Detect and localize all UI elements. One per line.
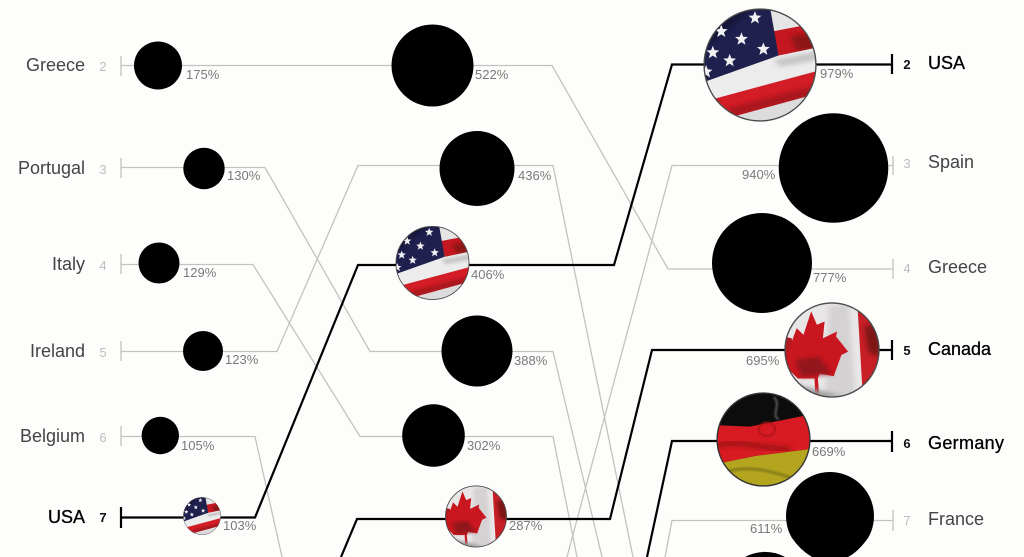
row: Italy left: 129% — [183, 265, 217, 280]
circle: Greece middle: 522% — [475, 67, 509, 82]
row: Italy left: 4 — [99, 258, 107, 273]
row: Ireland left: Ireland — [30, 341, 85, 361]
circle: Ireland middle — [440, 131, 552, 206]
circle: Italy middle — [402, 404, 501, 467]
row: Greece left: Greece — [26, 55, 85, 75]
flag circle: Canada middle — [444, 485, 543, 548]
circle: Portugal middle: 388% — [514, 353, 548, 368]
row: Ireland left: 5 — [99, 345, 107, 360]
row: Belgium left: Belgium — [20, 426, 85, 446]
row: Greece left: 175% — [186, 67, 220, 82]
row: Spain right: Spain — [928, 152, 974, 172]
row: Germany right: Germany — [928, 433, 1004, 453]
row: Greece right — [712, 213, 987, 313]
row: Canada right — [746, 301, 992, 399]
middle column — [392, 24, 552, 548]
row: Spain right: 3 — [903, 156, 911, 171]
row: France right: 7 — [903, 513, 911, 528]
row: Ireland left — [30, 331, 259, 371]
row: Spain right: 940% — [742, 167, 776, 182]
row: USA right: USA — [928, 53, 965, 73]
row: Germany right — [716, 392, 1004, 487]
connector: Germany — [647, 431, 892, 557]
connector: Italy — [121, 254, 577, 557]
row: Ireland left: 123% — [225, 352, 259, 367]
row: Germany right: 6 — [903, 436, 911, 451]
flag circle: USA middle: 406% — [471, 267, 505, 282]
circle: Italy middle: 302% — [467, 438, 501, 453]
row: France right: 611% — [750, 521, 783, 536]
row: Greece right: 777% — [813, 270, 847, 285]
row: USA left — [48, 497, 257, 535]
row: Belgium left: 6 — [99, 430, 107, 445]
circle: Greece middle — [392, 24, 509, 106]
connector: Belgium — [121, 426, 282, 557]
connector: Portugal — [121, 158, 602, 557]
connector: France — [665, 510, 893, 557]
connector: Greece — [121, 56, 893, 279]
row: Italy left — [52, 242, 217, 284]
right column — [700, 8, 1004, 557]
row: USA right: 979% — [820, 66, 854, 81]
connector: Spain — [567, 156, 893, 557]
row: Portugal left: 130% — [227, 168, 261, 183]
row: Belgium left: 105% — [181, 438, 215, 453]
connector: USA — [121, 54, 892, 528]
row: Canada right: 5 — [903, 343, 911, 358]
row: Canada right: Canada — [928, 339, 992, 359]
row: Spain right — [742, 113, 974, 223]
row: Greece left — [26, 42, 220, 90]
row: Greece right: Greece — [928, 257, 987, 277]
row: France right: France — [928, 509, 984, 529]
left column — [18, 42, 261, 535]
row: Greece right: 4 — [903, 261, 911, 276]
row: USA right — [700, 8, 965, 122]
row: Portugal left: Portugal — [18, 158, 85, 178]
row: USA left: 103% — [223, 518, 257, 533]
circle: partially visible at bottom edge — [745, 552, 785, 557]
circle: Portugal middle — [442, 316, 548, 386]
circle: Ireland middle: 436% — [518, 168, 552, 183]
row: Portugal left — [18, 148, 261, 189]
row: USA left: 7 — [99, 510, 107, 525]
row: USA left: USA — [48, 507, 85, 527]
flag circle: USA middle — [393, 226, 505, 300]
row: France right — [750, 472, 984, 557]
connector: Ireland — [121, 166, 633, 557]
connector: Canada — [341, 340, 892, 557]
row: Greece left: 2 — [99, 59, 107, 74]
row: Germany right: 669% — [812, 444, 846, 459]
flag circle: Canada middle: 287% — [509, 518, 543, 533]
row: Italy left: Italy — [52, 254, 85, 274]
row: Portugal left: 3 — [99, 162, 107, 177]
row: Belgium left — [20, 417, 215, 454]
row: Canada right: 695% — [746, 353, 780, 368]
row: USA right: 2 — [903, 57, 911, 72]
